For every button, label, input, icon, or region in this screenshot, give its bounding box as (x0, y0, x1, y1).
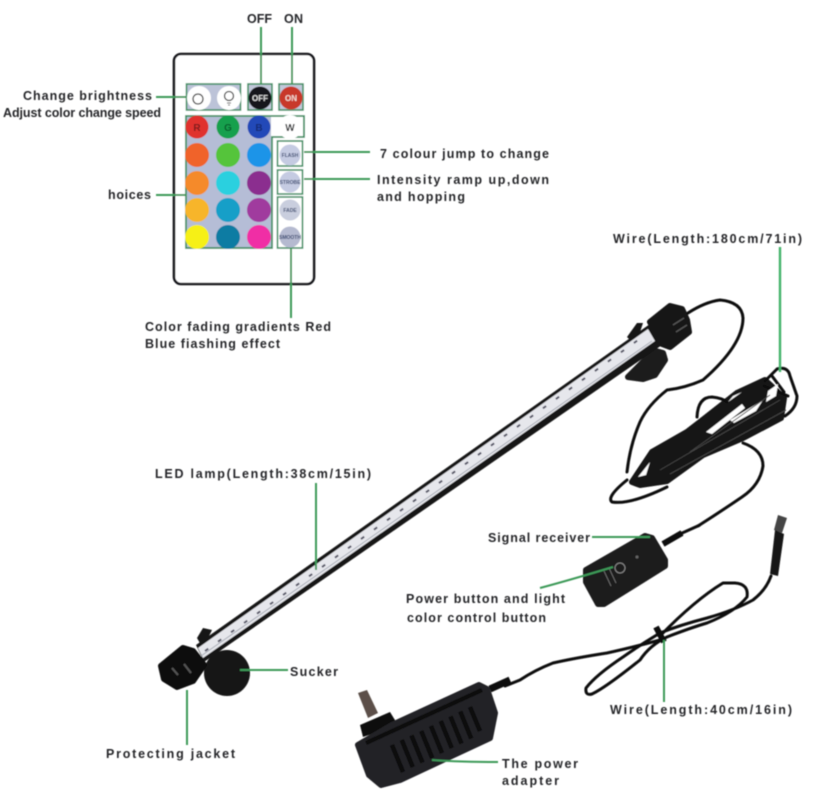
colour buttons: W (285, 123, 295, 134)
button background (187, 117, 271, 248)
clips (197, 323, 643, 645)
label: adjust speed: Adjust color change speed (3, 106, 161, 120)
mode buttons (278, 141, 302, 248)
label: sucker: Sucker (290, 665, 338, 679)
top end cap (650, 306, 689, 347)
long wire coil (611, 300, 797, 526)
label: protecting jacket: Protecting jacket (106, 747, 236, 761)
coil bottom loop (611, 480, 667, 502)
label: power adapter (502, 757, 578, 788)
hardware callout lines (187, 247, 780, 762)
coil top loop (697, 397, 727, 417)
coil body (632, 380, 784, 485)
label: OFF: OFF (247, 12, 272, 26)
adapter body (358, 685, 495, 785)
coil strands (660, 395, 786, 474)
mode buttons: FADE (283, 208, 297, 214)
signal receiver box (586, 525, 700, 604)
off button: OFF (252, 94, 268, 103)
lower sucker (204, 650, 250, 696)
colour buttons (185, 115, 304, 249)
panel: remote control (174, 54, 314, 284)
label: colour fading (145, 320, 331, 351)
remote callout lines (156, 27, 370, 318)
exit wire (698, 443, 763, 526)
coil openings (638, 384, 778, 477)
label: intensity ramp: Intensity ramp up,down (377, 173, 549, 187)
label: intensity ramp: and hopping (377, 190, 465, 204)
label: power button: Power button and light (406, 592, 566, 606)
label: signal receiver: Signal receiver (488, 531, 590, 545)
colour buttons: G (224, 123, 232, 134)
label: ON: ON (284, 12, 303, 26)
plug base (360, 712, 398, 737)
on button: ON (285, 94, 297, 103)
label: power adapter: The power (502, 757, 578, 771)
mode buttons: SMOOTH (279, 235, 301, 241)
label: colour fading: Color fading gradients Red (145, 320, 331, 334)
brightness buttons (186, 84, 241, 110)
label: power button: color control button (407, 611, 546, 625)
upper sucker (628, 350, 665, 379)
label: choices: hoices (108, 188, 151, 202)
label: LED lamp length: LED lamp(Length:38cm/15in) (155, 467, 371, 481)
label: power adapter: adapter (502, 774, 559, 788)
strain relief (490, 680, 510, 689)
label: colour fading: Blue fiashing effect (145, 337, 281, 351)
LED lamp (161, 306, 689, 696)
label: long wire length: Wire(Length:180cm/71in) (613, 232, 802, 246)
mode buttons: STROBE (280, 180, 301, 186)
plug prong (358, 690, 378, 718)
DC plug and short wire (505, 515, 787, 694)
colour buttons: B (255, 123, 263, 134)
vents (392, 707, 480, 772)
label: short wire length: Wire(Length:40cm/16in) (610, 703, 792, 717)
protecting jacket (161, 648, 204, 687)
lamp tube (196, 324, 662, 662)
top band (366, 690, 482, 743)
lamp wire (627, 300, 743, 472)
coil end loops (764, 368, 797, 416)
label: change brightness: Change brightness (23, 89, 152, 103)
label: colour jump: 7 colour jump to change (380, 147, 549, 161)
on button (279, 84, 303, 110)
remote body (174, 54, 314, 284)
colour buttons: R (193, 123, 201, 134)
off button (248, 84, 272, 110)
label: power button (406, 592, 566, 625)
mode buttons: FLASH (282, 153, 299, 159)
power adapter (358, 680, 510, 785)
label: intensity ramp (377, 173, 549, 204)
